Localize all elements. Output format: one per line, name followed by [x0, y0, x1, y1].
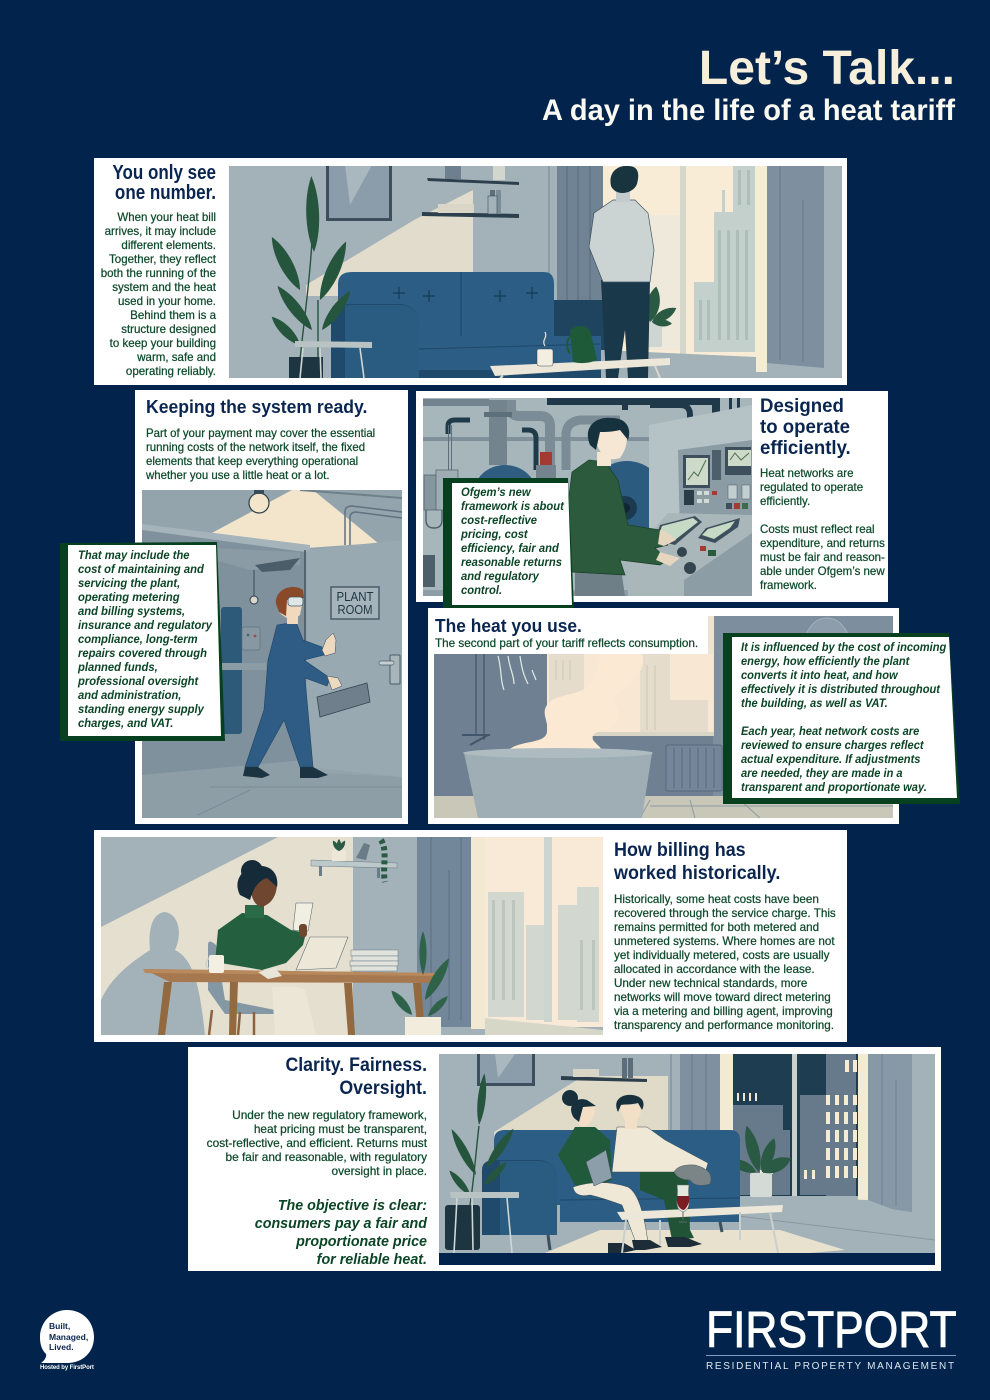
illustration: engineer entering plant room [142, 490, 402, 818]
body text: Under new technical standards, more [614, 976, 807, 990]
body text: Under the new regulatory framework, [232, 1108, 427, 1122]
man looking out [589, 166, 654, 378]
plant room sign: ROOM [338, 602, 372, 617]
coffee table [490, 358, 670, 376]
couple [558, 1090, 711, 1253]
heading [614, 840, 780, 884]
body text: Behind them is a [130, 308, 216, 322]
body text: to keep your building [110, 336, 216, 350]
body text: operating reliably. [126, 364, 216, 378]
plant [405, 1017, 441, 1035]
body text: oversight in place. [332, 1164, 427, 1178]
objective statement: consumers pay a fair and [255, 1215, 427, 1232]
subtitle: A day in the life of a heat tariff [542, 94, 955, 127]
callout text: Each year, heat network costs are [741, 726, 919, 738]
objective statement [255, 1197, 428, 1268]
callout text: cost-reflective [461, 515, 537, 527]
callout text: reviewed to ensure charges reflect [741, 740, 924, 752]
illustration: man at window in living room [229, 166, 842, 378]
body text [760, 466, 885, 592]
body text: Historically, some heat costs have been [614, 892, 819, 906]
left plant and stand [445, 1205, 480, 1250]
wordmark: FIRSTPORT [706, 1301, 957, 1358]
cat [674, 1165, 711, 1185]
callout text: and administration, [78, 690, 181, 702]
callout text: professional oversight [78, 676, 198, 688]
heading: efficiently. [760, 437, 851, 459]
body text: Part of your payment may cover the essential [146, 426, 375, 440]
body text: whether you use a little heat or a lot. [146, 468, 330, 482]
body text: efficiently. [760, 494, 810, 508]
callout text: operating metering [78, 592, 180, 604]
body text: arrives, it may include [105, 224, 216, 238]
body text: both the running of the [101, 266, 216, 280]
window plant [750, 1173, 772, 1197]
callout text: insurance and regulatory [78, 620, 212, 632]
callout text: servicing the plant, [78, 578, 180, 590]
steam [506, 654, 643, 756]
heading: worked historically. [614, 863, 780, 884]
body text: warm, safe and [137, 350, 216, 364]
heading: You only see [112, 162, 216, 184]
heading: Oversight. [339, 1078, 427, 1099]
console [628, 513, 752, 596]
heading: Designed [760, 395, 844, 417]
logo text [49, 1321, 88, 1352]
illustration: couple on sofa at night [439, 1054, 935, 1265]
illustration: woman reading bill at desk [101, 837, 603, 1035]
callout text [460, 487, 564, 594]
body text: networks will move toward direct metering [614, 990, 831, 1004]
night window [733, 1054, 858, 1196]
body text [614, 892, 836, 1032]
body text: via a metering and billing agent, improving [614, 1004, 833, 1018]
body text: unmetered systems. Where homes are not [614, 934, 835, 948]
control cabinet [649, 405, 752, 596]
callout text: charges, and VAT. [78, 718, 173, 730]
heading: to operate [760, 416, 850, 438]
logo text: Managed, [49, 1332, 88, 1342]
callout text: are needed, they are made in a [741, 768, 903, 780]
body text: Costs must reflect real [760, 522, 875, 536]
body text: able under Ofgem’s new [760, 564, 885, 578]
heading: How billing has [614, 840, 746, 861]
body text: used in your home. [118, 294, 216, 308]
callout inner with text [68, 545, 221, 736]
body text: regulated to operate [760, 480, 863, 494]
callout text: efficiency, fair and [461, 543, 559, 555]
objective statement: proportionate price [296, 1233, 427, 1250]
wine glass [677, 1185, 689, 1212]
callout text [741, 642, 946, 794]
body text: heat pricing must be transparent, [254, 1122, 427, 1136]
callout text: framework is about [461, 501, 564, 513]
panel: keeping the system ready [135, 390, 408, 824]
woman [558, 1127, 612, 1190]
sofa [554, 300, 606, 350]
callout text: Ofgem’s new [461, 487, 531, 499]
chair [208, 942, 275, 1014]
body text: running costs of the network itself, the fixed [146, 440, 365, 454]
callout inner with text [452, 483, 572, 605]
body text [101, 210, 216, 378]
callout text: planned funds, [78, 662, 158, 674]
callout: Ofgem's new framework [443, 478, 574, 608]
rug [545, 1230, 845, 1253]
objective statement: for reliable heat. [317, 1251, 427, 1268]
body text: cost-reflective, and efficient. Returns must [207, 1136, 427, 1150]
callout text: energy, how efficiently the plant [741, 656, 909, 668]
body text: be fair and reasonable, with regulatory [226, 1150, 427, 1164]
body text: Heat networks are [760, 466, 853, 480]
illustration: steaming bath [434, 616, 893, 818]
body text [207, 1108, 428, 1178]
body text: different elements. [121, 238, 216, 252]
panel: designed to operate efficiently [416, 391, 888, 602]
callout text: reasonable returns [461, 557, 562, 569]
callout text: compliance, long-term [78, 634, 198, 646]
callout text: actual expenditure. If adjustments [741, 754, 920, 766]
title [542, 42, 956, 127]
tagline: RESIDENTIAL PROPERTY MANAGEMENT [706, 1361, 956, 1372]
logo text: Built, [49, 1321, 70, 1331]
heading: Clarity. Fairness. [285, 1055, 427, 1076]
callout text: repairs covered through [78, 648, 207, 660]
divider [706, 1355, 956, 1356]
callout text: effectively it is distributed throughout [741, 684, 940, 696]
callout text: the building, as well as VAT. [741, 698, 888, 710]
logo: Firstport [706, 1301, 957, 1372]
hosted by: Hosted by FirstPort [40, 1365, 94, 1371]
coffee table [617, 1205, 783, 1220]
body text: When your heat bill [117, 210, 216, 224]
body text: must be fair and reason- [760, 550, 885, 564]
callout text: and regulatory [461, 571, 539, 583]
desk [143, 969, 438, 983]
body text: transparency and performance monitoring. [614, 1018, 834, 1032]
body text: yet individually metered, costs are usually [614, 948, 829, 962]
body text: recovered through the service charge. This [614, 906, 836, 920]
plant room sign [331, 587, 379, 619]
heading [285, 1055, 427, 1099]
curtains [557, 166, 603, 306]
heading [760, 395, 851, 459]
callout text: cost of maintaining and [78, 564, 204, 576]
panel: clarity fairness oversight [188, 1047, 941, 1271]
body text: allocated in accordance with the lease. [614, 962, 815, 976]
heading: one number. [115, 182, 216, 204]
callout text: and billing systems, [78, 606, 185, 618]
title line: Let's Talk: Let’s Talk... [699, 42, 955, 95]
callout inner with text [732, 637, 957, 798]
operator [566, 418, 680, 596]
panel: how billing has worked historically [94, 830, 847, 1042]
body text: The second part of your tariff reflects consumption. [435, 636, 698, 650]
callout text: It is influenced by the cost of incoming [741, 642, 946, 654]
objective statement: The objective is clear: [278, 1197, 427, 1214]
window [603, 166, 767, 358]
body text: framework. [760, 578, 817, 592]
body text: Together, they reflect [109, 252, 216, 266]
callout: that may include [60, 542, 225, 741]
body text [146, 426, 375, 482]
engineer [243, 587, 370, 778]
heading [112, 162, 216, 204]
callout text: That may include the [78, 550, 190, 562]
body text: system and the heat [112, 280, 216, 294]
sofa [494, 1130, 740, 1205]
callout text: transparent and proportionate way. [741, 782, 927, 794]
callout text: control. [461, 585, 502, 597]
man [612, 1127, 708, 1172]
heading: The heat you use. [435, 615, 582, 636]
body text: elements that keep everything operational [146, 454, 358, 468]
callout text [78, 550, 212, 730]
callout text: pricing, cost [461, 529, 528, 541]
body text: expenditure, and returns [760, 536, 885, 550]
left plant [266, 176, 354, 349]
icon: speech bubble [40, 1310, 94, 1363]
callout text: converts it into heat, and how [741, 670, 898, 682]
logo: Built, Managed, Lived. speech bubble [40, 1310, 94, 1371]
plant room sign: PLANT [336, 589, 374, 604]
woman [215, 860, 316, 1035]
body text: remains permitted for both metered and [614, 920, 819, 934]
panel: the heat you use [428, 608, 899, 824]
illustration: operator at control panel [423, 398, 752, 596]
plant by window [645, 320, 662, 347]
callout text: standing energy supply [78, 704, 204, 716]
panel: you only see one number [94, 158, 847, 385]
body text: structure designed [121, 322, 216, 336]
logo text: Lived. [49, 1342, 74, 1352]
callout: influenced by incoming energy [723, 633, 960, 804]
heading: Keeping the system ready. [146, 396, 367, 417]
